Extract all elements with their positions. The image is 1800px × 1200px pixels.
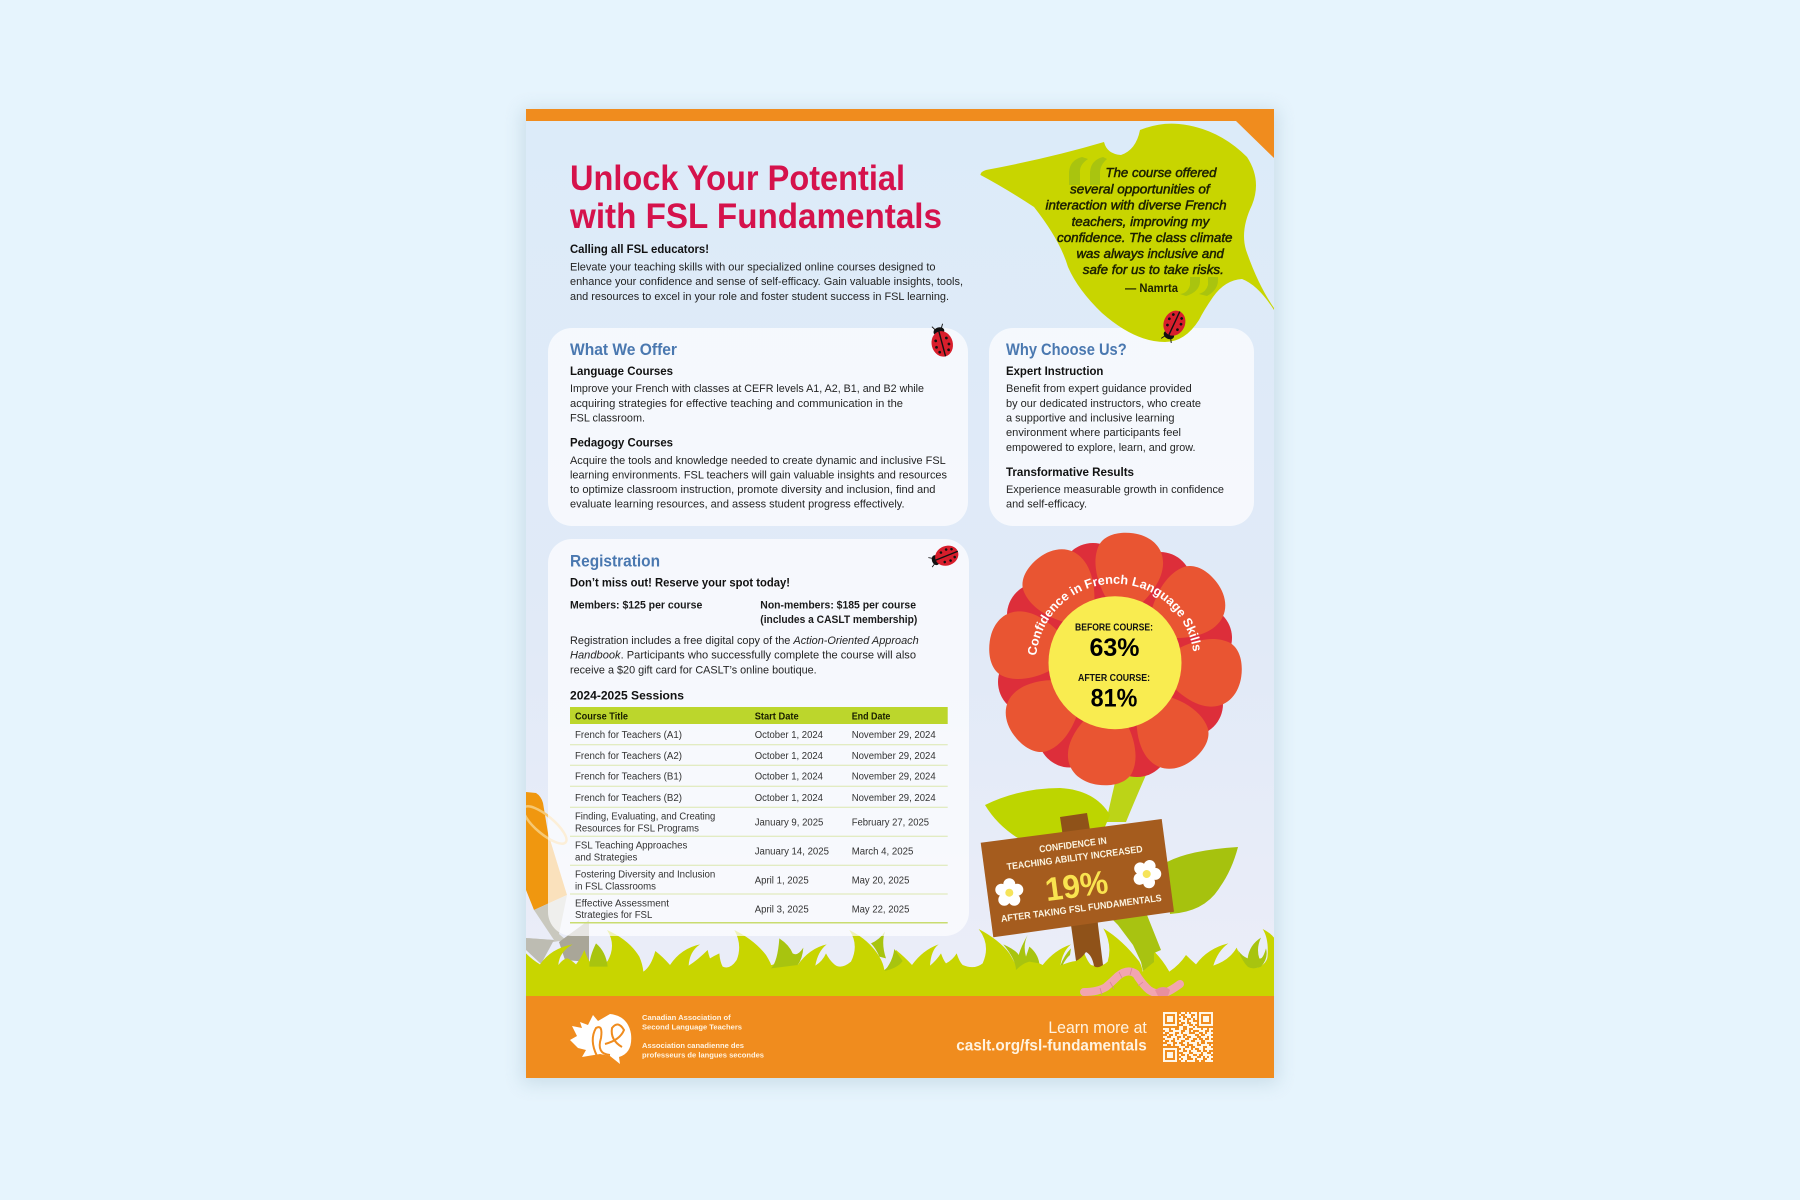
after course stat: 81% <box>1091 685 1137 713</box>
row: A2 <box>575 751 936 762</box>
title: Unlock Your Potential <box>570 159 905 198</box>
heading: Registration: Registration <box>570 552 660 571</box>
registration details: Handbook. Participants who successfully complete the course will also <box>570 650 916 662</box>
flower centre <box>1048 596 1182 729</box>
row: B1: November 29, 2024 <box>852 772 936 783</box>
text: Pedagogy Courses <box>570 436 947 511</box>
text: Transformative Results <box>1006 465 1224 511</box>
text: Expert Instruction: empowered to explore, learn, and grow. <box>1006 442 1196 454</box>
row: A2: French for Teachers (A2) <box>575 751 682 762</box>
icon: ladybug on leaf <box>1157 307 1189 345</box>
sessions table <box>570 707 948 923</box>
flower chart: confidence <box>989 532 1242 786</box>
text: Expert Instruction: by our dedicated instructors, who create <box>1006 398 1201 410</box>
icon: left daisy <box>995 878 1023 906</box>
text: Transformative Results: Experience measurable growth in confidence <box>1006 484 1224 496</box>
row: Finding, Evaluating: February 27, 2025 <box>852 818 929 829</box>
table header <box>570 707 948 724</box>
intro text: Elevate your teaching skills with our specialized online courses designed to <box>570 262 936 274</box>
price: non-members <box>760 599 917 626</box>
text: Language Courses: FSL classroom. <box>570 413 645 425</box>
row: FSL Teaching Approaches: and Strategies <box>575 852 637 863</box>
row: FSL Teaching Approaches: FSL Teaching Approaches <box>575 841 687 852</box>
row: Effective Assessment: May 22, 2025 <box>852 904 910 915</box>
row dividers <box>570 745 948 923</box>
text: Pedagogy Courses: Pedagogy Courses <box>570 436 673 450</box>
grass silhouette <box>526 928 1274 997</box>
row: B1 <box>575 772 936 783</box>
row: Finding, Evaluating: January 9, 2025 <box>755 818 824 829</box>
row: B2: October 1, 2024 <box>755 793 823 804</box>
quote text: several opportunities of <box>1070 182 1211 197</box>
sign text top: CONFIDENCE IN <box>1039 836 1107 855</box>
row: A2: November 29, 2024 <box>852 751 936 762</box>
leaf shape <box>980 124 1274 342</box>
row: Finding, Evaluating: Finding, Evaluating, and Creating <box>575 812 715 823</box>
title: with FSL Fundamentals <box>569 197 942 236</box>
card: Registration <box>548 539 969 936</box>
row: A2: October 1, 2024 <box>755 751 823 762</box>
row: Effective Assessment <box>575 898 910 921</box>
call to action: Learn more at <box>1048 1019 1147 1037</box>
price: non-members: (includes a CASLT membership) <box>760 614 917 626</box>
row: A1 <box>575 730 936 741</box>
organization name <box>642 1013 764 1059</box>
quotation marks <box>1069 157 1218 296</box>
after course stat: AFTER COURSE: <box>1078 673 1150 684</box>
call to action: caslt.org/fsl-fundamentals <box>956 1038 1147 1055</box>
before course stat: BEFORE COURSE: <box>1075 622 1153 633</box>
sign text top: TEACHING ABILITY INCREASED <box>1006 844 1143 873</box>
heading: What We Offer: What We Offer <box>570 340 677 359</box>
row: Fostering Diversity: in FSL Classrooms <box>575 881 656 892</box>
row: Effective Assessment: April 3, 2025 <box>755 904 809 915</box>
row: Fostering Diversity: May 20, 2025 <box>852 875 910 886</box>
heading: Why Choose Us: Why Choose Us? <box>1006 340 1127 359</box>
text: Expert Instruction: Expert Instruction <box>1006 364 1103 378</box>
poster sheet <box>526 109 1274 1078</box>
dark grass blades <box>589 932 1267 971</box>
circular label: Confidence in French Language Skills <box>1028 574 1201 655</box>
text: Language Courses <box>570 364 924 425</box>
text: Pedagogy Courses: evaluate learning resources, and assess student progress effectively. <box>570 499 904 511</box>
registration details: Registration includes a free digital copy of the Action-Oriented Approach <box>570 635 919 647</box>
heading: sessions: 2024-2025 Sessions <box>570 688 684 702</box>
illustration: grass <box>526 928 1274 997</box>
sign post <box>1060 813 1103 967</box>
infographic poster <box>517 104 1283 1088</box>
row: Fostering Diversity: Fostering Diversity and Inclusion <box>575 870 715 881</box>
text: Expert Instruction: a supportive and inclusive learning <box>1006 413 1174 425</box>
text: Expert Instruction: environment where participants feel <box>1006 427 1181 439</box>
organization name: Second Language Teachers <box>642 1022 742 1031</box>
illustration: worm <box>1084 968 1180 996</box>
row: B2: French for Teachers (B2) <box>575 793 682 804</box>
text: Transformative Results: Transformative Results <box>1006 465 1134 479</box>
price: non-members: Non-members: $185 per course <box>760 599 916 611</box>
row: B2: November 29, 2024 <box>852 793 936 804</box>
before course stat: 63% <box>1090 634 1140 662</box>
text: Transformative Results: and self-efficacy. <box>1006 499 1087 511</box>
text: Expert Instruction <box>1006 364 1201 454</box>
row: B1: October 1, 2024 <box>755 772 823 783</box>
illustration: orange shovel <box>526 792 589 964</box>
table header: Course Title <box>575 711 629 722</box>
quote text: teachers, improving my <box>1072 214 1211 229</box>
table header: Start Date <box>755 711 799 722</box>
row: Effective Assessment: Strategies for FSL <box>575 910 653 921</box>
text: Language Courses: Language Courses <box>570 364 673 378</box>
sign stat: 19% <box>1043 863 1110 908</box>
illustration: upper stem <box>1106 770 1146 822</box>
sign text bottom: AFTER TAKING FSL FUNDAMENTALS <box>1000 893 1163 925</box>
row: FSL Teaching Approaches: March 4, 2025 <box>852 847 914 858</box>
organization name: Association canadienne des <box>642 1041 744 1050</box>
illustration: left leaf <box>985 788 1110 850</box>
QR code <box>1163 1013 1213 1061</box>
card: Why Choose Us <box>989 328 1254 526</box>
icon: right daisy <box>1129 856 1165 891</box>
text: Pedagogy Courses: Acquire the tools and knowledge needed to create dynamic and inclusive FSL <box>570 455 946 467</box>
illustration: lower stem <box>1098 905 1161 971</box>
row: B1: French for Teachers (B1) <box>575 772 682 783</box>
after course stat <box>1078 673 1150 713</box>
row: FSL Teaching Approaches: January 14, 2025 <box>755 847 829 858</box>
row: Effective Assessment: Effective Assessment <box>575 898 669 909</box>
intro text: Calling all FSL educators! <box>570 242 709 256</box>
row: B2 <box>575 793 936 804</box>
illustration: right leaf <box>1167 847 1238 914</box>
quote leaf <box>980 124 1274 342</box>
row: Fostering Diversity <box>575 870 910 892</box>
quote text: The course offered <box>1106 165 1217 180</box>
footer band <box>526 996 1274 1078</box>
top orange bar and corner <box>526 109 1274 158</box>
text: Pedagogy Courses: learning environments. FSL teachers will gain valuable insights and resources <box>570 470 947 482</box>
organization name: Canadian Association of <box>642 1013 731 1022</box>
price: members: Members: $125 per course <box>570 599 702 611</box>
call to action <box>956 1019 1147 1055</box>
sign: teaching confidence <box>981 819 1174 937</box>
text: Expert Instruction: Benefit from expert guidance provided <box>1006 383 1192 395</box>
row: A1: October 1, 2024 <box>755 730 823 741</box>
quote text <box>1046 165 1232 295</box>
text: Language Courses: acquiring strategies for effective teaching and communication in the <box>570 398 903 410</box>
quote text: confidence. The class climate <box>1057 230 1232 245</box>
quote text: was always inclusive and <box>1076 246 1225 261</box>
quote text: interaction with diverse French <box>1046 198 1226 213</box>
card: What We Offer <box>548 328 968 526</box>
icon: ladybug on What We Offer card <box>927 322 956 359</box>
row: FSL Teaching Approaches <box>575 841 914 863</box>
front petals <box>985 529 1246 789</box>
organization name: professeurs de langues secondes <box>642 1050 764 1059</box>
quote text: — Namrta <box>1125 281 1178 295</box>
quote text: safe for us to take risks. <box>1083 262 1224 277</box>
table header: End Date <box>852 711 891 722</box>
row: Fostering Diversity: April 1, 2025 <box>755 875 809 886</box>
row: Finding, Evaluating: Resources for FSL Programs <box>575 823 699 834</box>
logo: CASLT <box>570 1014 631 1064</box>
icon: ladybug on Registration card <box>927 542 961 571</box>
intro text: enhance your confidence and sense of self-efficacy. Gain valuable insights, tools, <box>570 276 963 288</box>
row: Finding, Evaluating <box>575 812 929 834</box>
registration details: receive a $20 gift card for CASLT’s online boutique. <box>570 664 817 676</box>
back petals <box>998 543 1232 777</box>
subheading: reserve your spot: Don’t miss out! Reserve your spot today! <box>570 576 790 590</box>
poster shadow <box>522 109 1278 1084</box>
title <box>569 159 942 236</box>
text: Pedagogy Courses: to optimize classroom instruction, promote diversity and inclusion, find and <box>570 484 936 496</box>
registration details <box>570 635 919 676</box>
row: A1: French for Teachers (A1) <box>575 730 682 741</box>
before course stat <box>1075 622 1153 662</box>
row: A1: November 29, 2024 <box>852 730 936 741</box>
intro text <box>570 242 963 303</box>
intro text: and resources to excel in your role and foster student success in FSL learning. <box>570 291 949 303</box>
text: Language Courses: Improve your French with classes at CEFR levels A1, A2, B1, and B2 while <box>570 383 924 395</box>
